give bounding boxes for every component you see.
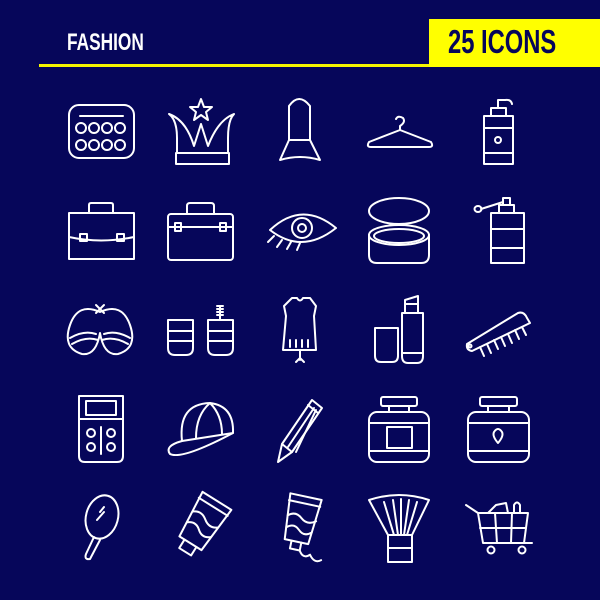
icon: spray bottle — [474, 198, 524, 263]
icon: pencil — [278, 400, 322, 462]
icon: cap — [168, 403, 233, 455]
icon: crown — [169, 99, 234, 164]
icon: shopping cart — [466, 502, 532, 554]
yellow underline — [39, 64, 430, 67]
icon: tube — [171, 492, 231, 561]
icon: makeup case — [168, 203, 233, 260]
icon: tube squeeze — [278, 493, 333, 562]
icon: briefcase — [69, 203, 134, 259]
icon: bra — [68, 305, 132, 354]
icon: pump bottle — [484, 100, 513, 164]
icon: eye — [268, 214, 336, 250]
icon: comb — [467, 313, 530, 356]
badge: 25 icons — [429, 19, 600, 67]
icon: eyeshadow palette — [69, 105, 134, 158]
icon: nail polish & lipstick — [375, 296, 423, 363]
icon: perfume jar — [369, 397, 429, 462]
icon: makeup palette — [79, 396, 123, 462]
icon: hand mirror — [81, 492, 123, 559]
icon: shaving brush — [369, 495, 429, 562]
title: FASHION — [67, 29, 144, 56]
badge: 25 icons: 25 ICONS — [448, 23, 556, 60]
icon: dress form — [283, 298, 316, 362]
icon: cream jar — [468, 397, 529, 462]
icon: hanger — [368, 117, 432, 147]
icon: powder compact — [369, 198, 429, 263]
icon: brush — [280, 99, 320, 160]
icon: nail polish & mascara — [168, 306, 233, 355]
